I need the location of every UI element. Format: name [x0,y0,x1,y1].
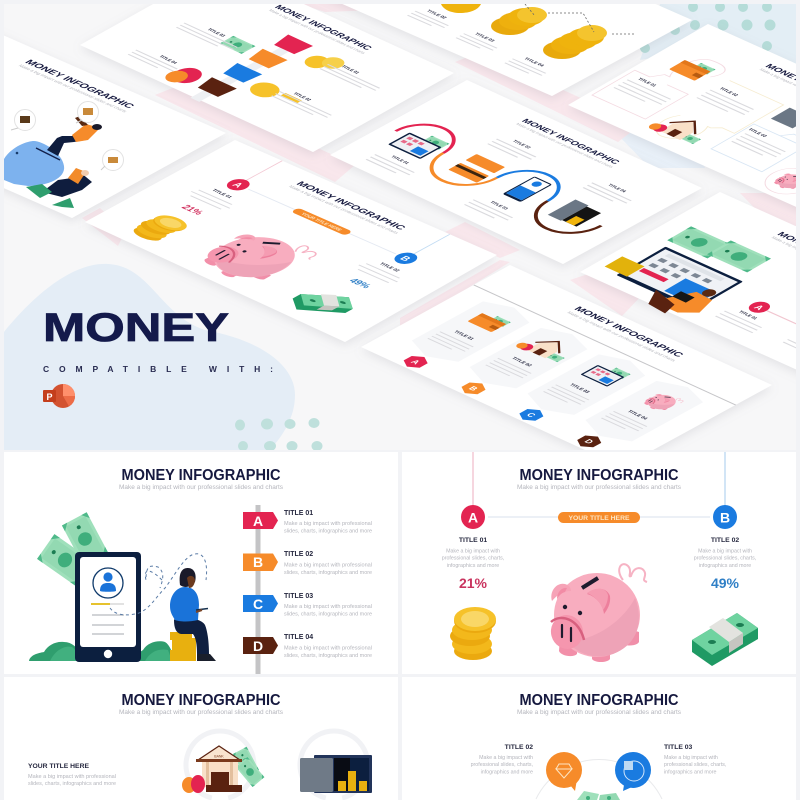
icon: PowerPoint: P [46,392,53,402]
badge A [461,505,485,529]
title: MONEY INFOGRAPHIC [122,467,281,484]
icon: coin stacks [441,4,636,59]
icon: banknotes [37,512,108,586]
text block: Make a big impact with professional [28,774,116,780]
decor: dotted blue corner [613,2,796,168]
card: piggy slide: TITLE 02 [377,262,401,273]
text: items: Make a big impact with professional [284,646,372,652]
card: blue pig slide: Make a big impact with our professional slides and charts [17,64,129,113]
icon: notes [577,791,620,800]
card: piggy slide: 49% [346,277,373,290]
card: wallet connected boxes slide: TITLE 02 [718,87,740,97]
subtitle: Make a big impact with our professional slides and charts [517,709,681,716]
card: four columns slide: Make a big impact with our professional slides and charts [566,311,678,362]
text: title 03: professional slides, charts, [664,762,726,768]
card: piggy slide [85,140,497,342]
heading: MONEY: MONEY [43,306,229,350]
card: coins slide: TITLE 02 [426,9,448,20]
card: piggy slide: A [229,181,245,189]
card: blue pig slide: MONEY INFOGRAPHIC [23,58,137,110]
card: coins slide: TITLE 03 [474,32,496,43]
card: four columns slide [362,284,767,450]
card: four columns slide: D [582,438,596,445]
decor: teal dots [235,418,322,451]
pill: YOUR TITLE HERE [568,515,630,522]
icon: blue bubble [615,752,651,791]
panel: bubbles slide [402,677,796,800]
block: title 02: TITLE 02 [711,537,739,544]
card: piggy slide: YOUR TITLE HERE [299,212,344,232]
card: four columns slide: TITLE 02 [510,356,533,368]
text: items: TITLE 01 [284,510,313,517]
title: MONEY INFOGRAPHIC [122,692,281,709]
card: four columns slide: MONEY INFOGRAPHIC [572,305,687,359]
card: S-curve slide: TITLE 03 [489,200,510,210]
timeline ribbon [243,505,278,674]
badge B [713,505,737,529]
card: S-curve slide [330,80,702,264]
card: hands and bags slide: Make a big impact with our professional slides and charts [268,8,367,55]
text: items: Make a big impact with professional [284,521,372,527]
text: title 02 [471,744,533,776]
card: four columns slide: A [409,359,422,366]
text: items: TITLE 02 [284,551,313,558]
card: coins slide: TITLE 04 [523,57,546,67]
block: title 01: 21% [459,575,488,591]
badge B: B [720,510,730,526]
timeline ribbon: B [253,554,263,570]
panel: bank and safe slide [4,677,398,800]
icon: bushes [29,641,175,661]
icon: safe [300,731,372,798]
card: wallet connected boxes slide: TITLE 03 [747,128,769,138]
block: title 02: infographics and more [699,563,751,569]
card: laptop slide: A [752,304,767,312]
text block: slides, charts, infographics and more [28,781,116,787]
card: four columns slide: B [466,385,480,392]
block: title 01: professional slides, charts, [442,556,504,562]
pill [558,512,640,523]
card: laptop slide: TITLE 01 [738,310,759,320]
decoration: dashed path [110,554,207,615]
icon: PowerPoint [43,384,75,408]
text: items: slides, charts, infographics and more [284,612,372,618]
text: items [284,510,372,659]
timeline ribbon: A [253,513,263,529]
card: hands and bags slide: TITLE 03 [206,28,227,38]
timeline ribbon: C [253,596,263,612]
text: title 02: TITLE 02 [505,744,533,751]
card: four columns slide: C [524,412,538,419]
text: items: TITLE 03 [284,593,313,600]
timeline ribbon: D [253,638,263,654]
card: piggy slide: Make a big impact with our professional slides and charts [288,185,401,235]
card: piggy slide: 21% [178,204,206,217]
card: laptop slide [585,200,796,374]
card: hands and bags slide: TITLE 02 [292,92,313,102]
hero panel [0,0,800,467]
title: MONEY INFOGRAPHIC [520,467,679,484]
card: piggy slide: MONEY INFOGRAPHIC [294,180,409,231]
icon: orange bubble [546,752,582,791]
card: hands and bags slide: MONEY INFOGRAPHIC [272,4,374,51]
text: title 02: infographics and more [481,770,533,776]
text: title 03: TITLE 03 [664,744,693,751]
arc [536,760,662,799]
block: title 01 [442,537,504,591]
text: items: slides, charts, infographics and more [284,570,372,576]
block: title 02: 49% [711,575,740,591]
card: four columns slide: TITLE 04 [625,409,649,421]
icon: bank [182,731,264,798]
icon: thought bubbles [11,102,124,170]
card: hands and bags slide [80,0,454,152]
block: title 02 [694,537,756,591]
title: MONEY INFOGRAPHIC [520,692,679,709]
card: S-curve slide: MONEY INFOGRAPHIC [519,118,622,165]
subtitle: Make a big impact with our professional slides and charts [517,484,681,491]
chart: S curve path [394,124,602,234]
icon: coins [450,607,496,660]
icon: phone [75,552,141,662]
card: piggy slide: B [397,255,413,263]
text block [28,763,116,787]
card: four columns slide: TITLE 03 [568,383,591,394]
text block: YOUR TITLE HERE [28,763,90,770]
text: title 02: Make a big impact with [479,755,533,761]
icon: seated woman [170,568,216,661]
card: hands and bags slide: TITLE 04 [158,55,179,65]
text: title 03 [664,744,726,776]
text: title 02: professional slides, charts, [471,762,533,768]
block: title 02: Make a big impact with [698,548,752,554]
text: items: Make a big impact with professional [284,562,372,568]
block: title 01: infographics and more [447,563,499,569]
decor: pink bands [82,4,796,330]
icon: coin stack seat [170,632,196,661]
panel: piggy slide [402,452,796,674]
card: blue pig slide [4,60,221,220]
icon: cash bundle [692,613,758,666]
subtitle: Make a big impact with our professional slides and charts [119,484,283,491]
card: S-curve slide: Make a big impact with our professional slides and charts [515,122,615,168]
card: wallet connected boxes slide: TITLE 01 [637,77,658,87]
decor: blue blob [4,264,295,455]
block: title 01: Make a big impact with [446,548,500,554]
block: title 02: professional slides, charts, [694,556,756,562]
text: items: Make a big impact with professional [284,604,372,610]
subtitle: Make a big impact with our professional slides and charts [119,709,283,716]
card: wallet connected boxes slide [568,24,800,214]
card: coins slide [332,4,692,98]
panel: phone profile slide [4,452,398,674]
text: title 03: infographics and more [664,770,716,776]
badge A: A [468,510,478,526]
card: four columns slide: TITLE 01 [452,330,475,341]
card: S-curve slide: TITLE 02 [512,139,533,149]
card: S-curve slide: TITLE 04 [607,183,628,193]
text: items: TITLE 04 [284,634,313,641]
icon: bank: BANK [214,754,224,758]
block: title 01: TITLE 01 [459,537,487,544]
text: title 03: Make a big impact with [664,755,718,761]
card: hands and bags slide: TITLE 01 [340,65,361,75]
card: piggy slide: TITLE 01 [210,188,234,199]
icon: piggy bank [547,564,647,662]
text: items: slides, charts, infographics and more [284,528,372,534]
text: compatible with: COMPATIBLE WITH: [43,364,273,374]
text: items: slides, charts, infographics and more [284,653,372,659]
card: S-curve slide: TITLE 01 [390,155,411,165]
